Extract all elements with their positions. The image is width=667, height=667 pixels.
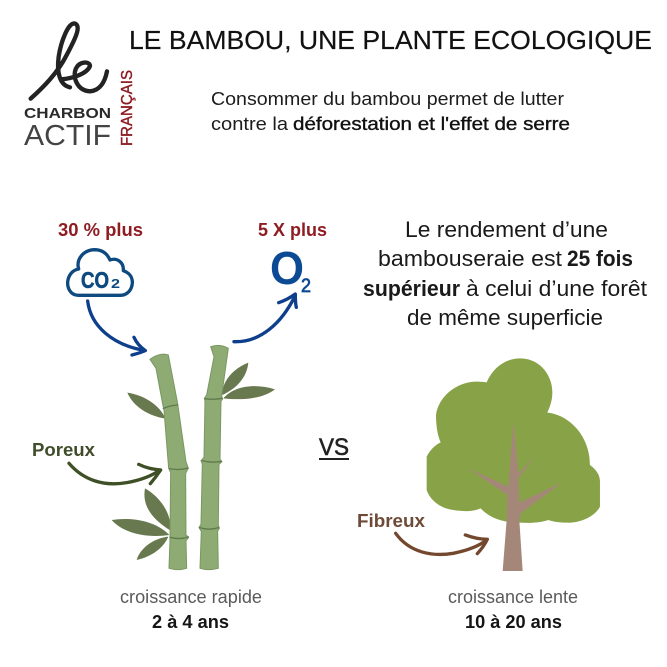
label: poreux: Poreux bbox=[32, 440, 95, 460]
logo: script le bbox=[31, 23, 107, 99]
label: fibreux: Fibreux bbox=[357, 511, 425, 531]
subtitle: Consommer du bambou permet de lutter bbox=[211, 89, 564, 109]
tree trunk bbox=[468, 422, 562, 571]
subtitle: contre la bbox=[211, 114, 289, 134]
caption: tree growth: croissance lente bbox=[448, 587, 578, 607]
icon: O2: O bbox=[270, 242, 304, 294]
title: LE BAMBOU, UNE PLANTE ECOLOGIQUE bbox=[129, 25, 652, 55]
logo bbox=[24, 23, 136, 152]
right stem bbox=[199, 345, 228, 570]
text: rendement: bambouseraie est bbox=[378, 246, 562, 271]
text: rendement: 25 fois bbox=[567, 246, 633, 271]
label: vs: VS bbox=[319, 434, 349, 461]
text: rendement: de même superficie bbox=[407, 305, 603, 330]
illustration: tree bbox=[427, 358, 600, 571]
caption: tree growth: 10 à 20 ans bbox=[465, 612, 562, 632]
text: rendement: Le rendement d’une bbox=[405, 217, 608, 242]
logo: francais: FRANÇAIS bbox=[119, 70, 136, 146]
tree crown bbox=[427, 358, 600, 523]
arrow: fibreux bbox=[396, 533, 487, 554]
arrow: CO2 to bamboo bbox=[88, 301, 145, 355]
label: 5 X plus: 5 X plus bbox=[258, 220, 327, 240]
subtitle bbox=[211, 89, 570, 134]
bamboo leaves bbox=[112, 363, 275, 560]
text: rendement: supérieur bbox=[363, 276, 460, 301]
text: rendement bbox=[363, 217, 647, 330]
stem joints bbox=[163, 398, 222, 539]
label: 30 % plus: 30 % plus bbox=[58, 220, 143, 240]
logo: actif: ACTIF bbox=[24, 120, 111, 152]
caption: bamboo growth: croissance rapide bbox=[120, 587, 262, 607]
icon: O2: 2 bbox=[301, 276, 311, 297]
icon: CO2 cloud: 2 bbox=[111, 276, 120, 291]
caption: tree growth bbox=[448, 587, 578, 632]
arrow: bamboo to O2 bbox=[234, 294, 296, 342]
left stem bbox=[150, 354, 189, 570]
text: rendement: à celui d’une forêt bbox=[466, 276, 647, 301]
subtitle: déforestation et l'effet de serre bbox=[293, 114, 570, 134]
caption: bamboo growth bbox=[120, 587, 262, 632]
arrow: poreux bbox=[69, 463, 161, 484]
illustration: bamboo bbox=[112, 345, 275, 570]
caption: bamboo growth: 2 à 4 ans bbox=[152, 612, 229, 632]
logo: charbon: CHARBON bbox=[24, 105, 111, 122]
icon: CO2 cloud bbox=[68, 250, 132, 295]
icon: CO2 cloud: CO bbox=[81, 267, 109, 293]
